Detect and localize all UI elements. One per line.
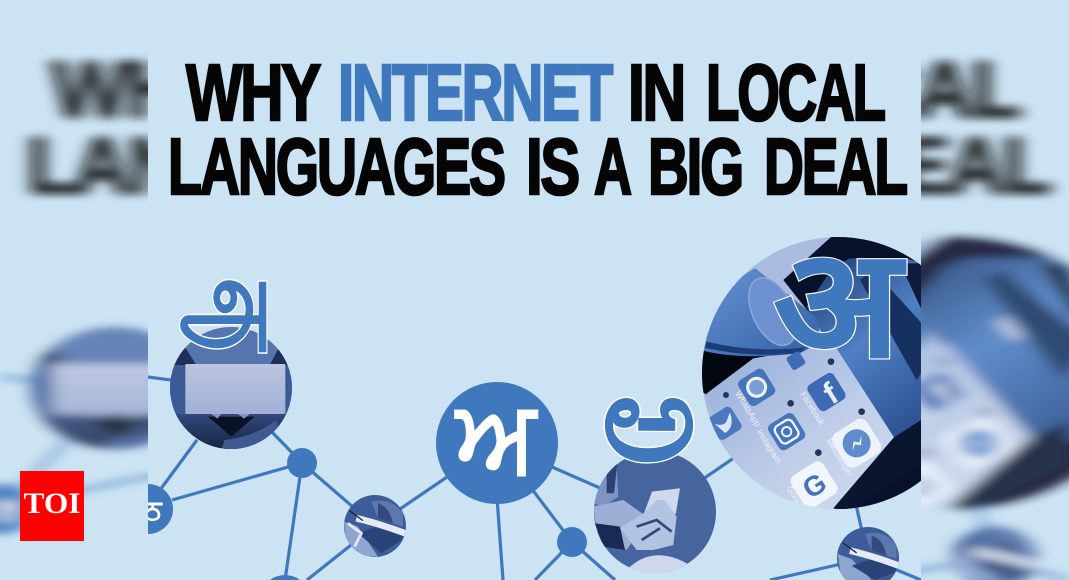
letter over phone photo: अ: [773, 219, 907, 388]
app icon: google: G: [797, 467, 832, 505]
photo circle: hands small right: [837, 526, 900, 580]
title: IN: [628, 48, 684, 137]
app labels: Messenger: [824, 436, 856, 478]
node: small letter circle left: ਠ: [143, 495, 163, 525]
app labels: Instagram: [755, 427, 784, 465]
letter above tablet photo: ಅ: [601, 354, 697, 486]
letter above laptop photo: அ: [179, 236, 273, 361]
title: IS: [526, 122, 578, 211]
title: LANGUAGES: [168, 122, 504, 211]
node: large blue letter circle: ਅ: [453, 381, 539, 492]
central panel: [148, 54, 921, 580]
app labels: WhatsApp: [733, 389, 763, 428]
app labels: Facebook: [798, 390, 827, 428]
app icon: bird: [710, 406, 742, 440]
app icon: google: [788, 459, 840, 511]
app icon: messenger: [829, 416, 884, 471]
photo circle: person with laptop: [168, 327, 293, 451]
photo circle: woman with tablet: [593, 450, 717, 577]
app icon: instagram: [768, 413, 806, 450]
photo circle: phone with social apps: [700, 235, 1043, 513]
TOI logo: [20, 471, 84, 541]
TOI logo: TOI: [24, 487, 80, 520]
network of nodes and photos: [123, 235, 1043, 580]
node: small blue dot right: [557, 527, 587, 557]
node: large blue letter circle: [436, 381, 558, 504]
node: small letter circle left: [123, 484, 173, 534]
title: DEAL: [764, 122, 907, 211]
app icon: facebook: [805, 371, 851, 418]
title: BIG: [648, 122, 742, 211]
network connector lines: [148, 377, 921, 580]
photo circle: phone with social apps: 500: [866, 315, 892, 343]
title: LOCAL: [706, 48, 885, 137]
node: bottom partial circle: [270, 575, 300, 580]
photo circle: hands small left: [343, 494, 406, 557]
app labels: [733, 389, 856, 513]
node: small blue dot left: [287, 448, 317, 478]
app icon: chat bubble: [738, 368, 776, 406]
app icon: facebook: f: [817, 376, 845, 411]
title: [168, 48, 907, 211]
app badge dots: [723, 358, 865, 456]
small icon under thumb: [786, 351, 806, 370]
title: A: [594, 122, 631, 211]
app labels: Google: [785, 484, 808, 513]
title: INTERNET: [338, 48, 613, 137]
title: WHY: [186, 48, 321, 137]
